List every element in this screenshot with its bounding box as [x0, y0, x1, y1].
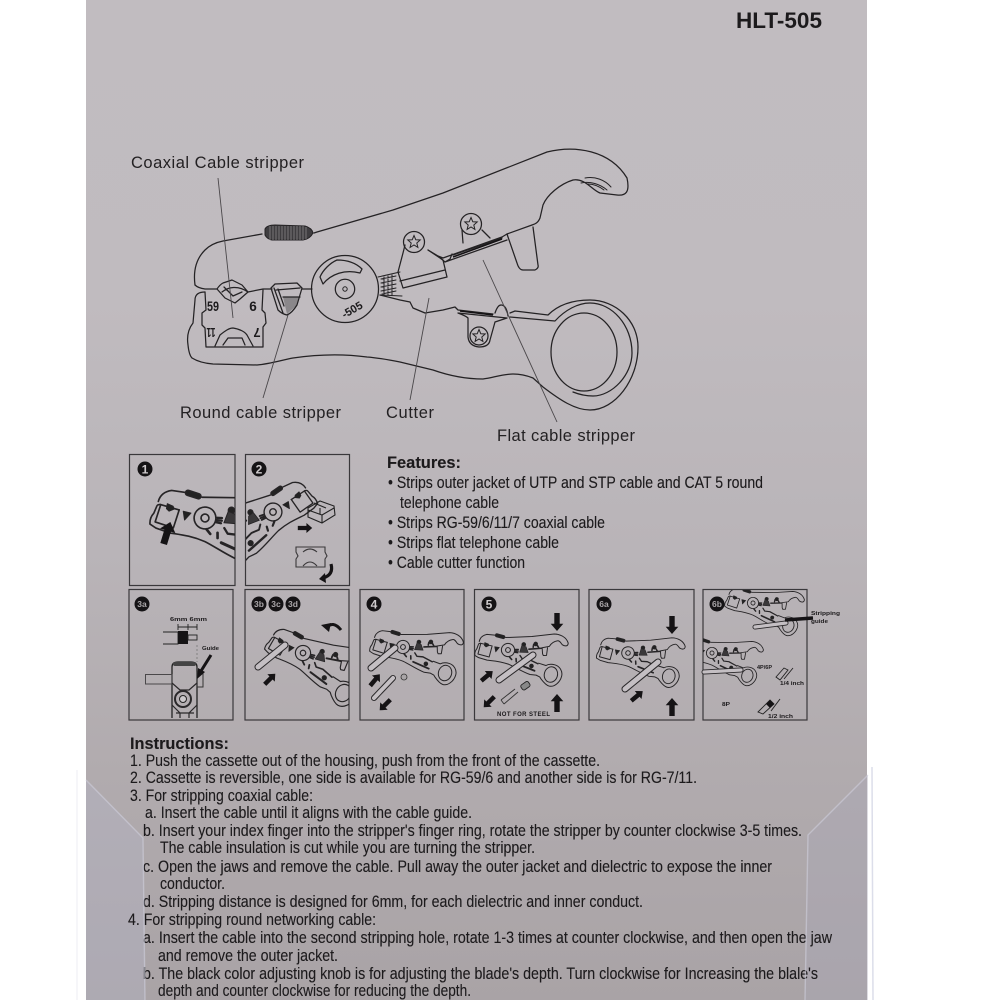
right plastic sleeve flap	[805, 775, 868, 1000]
card background	[86, 0, 867, 1000]
panel 6a: flat cable: 6a	[599, 599, 609, 609]
instructions text block: conductor.	[160, 875, 225, 893]
label: flat cable stripper: Flat cable stripper	[497, 427, 636, 445]
wheel with model mark: -505	[340, 300, 365, 321]
cassette: 7	[253, 325, 261, 340]
instructions text block: d. Stripping distance is designed for 6mm, for each dielectric and inner conduct.	[143, 893, 643, 911]
label: coaxial cable stripper: Coaxial Cable stripper	[131, 154, 304, 172]
features text block: Features:	[387, 454, 461, 472]
cassette: 59	[207, 299, 219, 314]
panel 6b: stripping guide: 1/2 inch	[768, 714, 794, 720]
instructions text block: 1. Push the cassette out of the housing, push from the front of the cassette.	[130, 752, 600, 770]
panel 3a: cable guide: 6mm 6mm	[170, 617, 207, 623]
instructions text block: a. Insert the cable into the second stripping hole, rotate 1-3 times at counter clockwise, and then open the jaw	[143, 929, 832, 947]
panel 1: remove cassette: 1	[142, 462, 149, 476]
panel 3b 3c 3d: rotating the stripper	[244, 588, 350, 721]
instructions text block: depth and counter clockwise for reducing the depth.	[158, 982, 471, 1000]
panel 2: reverse cassette: 2	[256, 462, 263, 476]
lower body edge and lower screw	[380, 295, 508, 347]
model number: HLT-505	[736, 8, 822, 33]
left plastic sleeve flap	[86, 780, 145, 1000]
features text block: telephone cable	[400, 494, 499, 512]
panel 3a: cable guide	[129, 590, 233, 720]
left plastic sleeve edge	[77, 770, 145, 1000]
leader lines	[218, 178, 557, 422]
wheel with model mark	[302, 256, 378, 322]
blade teeth	[378, 272, 402, 296]
round cable stripper jaw	[271, 283, 302, 315]
panel 3b 3c 3d: rotating the stripper: 3c	[271, 599, 281, 609]
instructions text block: 4. For stripping round networking cable:	[128, 911, 376, 929]
panel 6b: stripping guide	[702, 588, 840, 721]
features text block: • Strips RG-59/6/11/7 coaxial cable	[388, 514, 605, 532]
instructions text block: Instructions:	[130, 735, 229, 753]
panel 6a: flat cable	[589, 590, 694, 720]
panel 5: not for steel: NOT FOR STEEL	[497, 712, 550, 718]
tool lower body and finger ring outline	[188, 289, 638, 410]
panel 5: not for steel	[472, 590, 579, 720]
instructions text block: The cable insulation is cut while you are turning the stripper.	[160, 839, 535, 857]
finger grooves	[581, 177, 611, 190]
instructions text block: 3. For stripping coaxial cable:	[130, 787, 313, 805]
panel 3b 3c 3d: rotating the stripper: 3b	[254, 599, 264, 609]
label: round cable stripper: Round cable stripper	[180, 404, 342, 422]
instructions text block	[128, 735, 832, 1000]
finger ring inner lines	[510, 303, 632, 396]
features text block: • Strips flat telephone cable	[388, 534, 559, 552]
tool diagram with labelled parts	[131, 149, 638, 445]
instructions text block: b. Insert your index finger into the stripper's finger ring, rotate the stripper by counter clockwise 3-5 times.	[143, 822, 802, 840]
features text block: • Strips outer jacket of UTP and STP cable and CAT 5 round	[388, 474, 763, 492]
cable stripper line drawing	[188, 149, 638, 422]
cutter blade and bracket	[398, 232, 447, 288]
jaw with coaxial blade	[195, 280, 248, 303]
panel 2: reverse cassette	[244, 454, 350, 586]
instructions text block: and remove the outer jacket.	[158, 947, 338, 965]
panel 6b: stripping guide: 1/4 inch	[780, 681, 805, 687]
instructions text block: b. The black color adjusting knob is for adjusting the blade's depth. Turn clockwise for Increasing the blale's	[143, 965, 818, 983]
tool upper body outline	[194, 149, 628, 285]
features text block	[387, 454, 763, 572]
panel 6b: stripping guide: 4P/6P	[757, 665, 772, 671]
panel 5: not for steel: 5	[486, 598, 493, 612]
cassette: 11	[206, 325, 216, 340]
stripping guide callout: Stripping	[811, 611, 840, 617]
cassette: 6	[249, 299, 257, 314]
flat stripper bracket and bar	[428, 214, 538, 270]
cassette	[202, 290, 266, 347]
panel 4: remove jacket	[360, 590, 467, 720]
instructions text block: a. Insert the cable until it aligns with the cable guide.	[145, 804, 472, 822]
label: cutter: Cutter	[386, 404, 434, 422]
panel 3a: cable guide: Guide	[202, 646, 219, 652]
panel 4: remove jacket: 4	[371, 598, 378, 612]
instructions text block: 2. Cassette is reversible, one side is available for RG-59/6 and another side is for RG-7/11.	[130, 769, 697, 787]
panel 1: remove cassette	[128, 454, 236, 586]
instructions text block: c. Open the jaws and remove the cable. Pull away the outer jacket and dielectric to expose the inner	[143, 858, 772, 876]
panel 6b: stripping guide: 8P	[722, 702, 730, 708]
panel 3b 3c 3d: rotating the stripper: 3d	[288, 599, 298, 609]
right plastic sleeve edge	[805, 767, 873, 1000]
panel 6b: stripping guide: guide	[811, 619, 828, 625]
features text block: • Cable cutter function	[388, 554, 525, 572]
panel 6b: stripping guide: 6b	[712, 599, 722, 609]
panel 3a: cable guide: 3a	[137, 599, 147, 609]
adjusting knob	[265, 225, 313, 240]
